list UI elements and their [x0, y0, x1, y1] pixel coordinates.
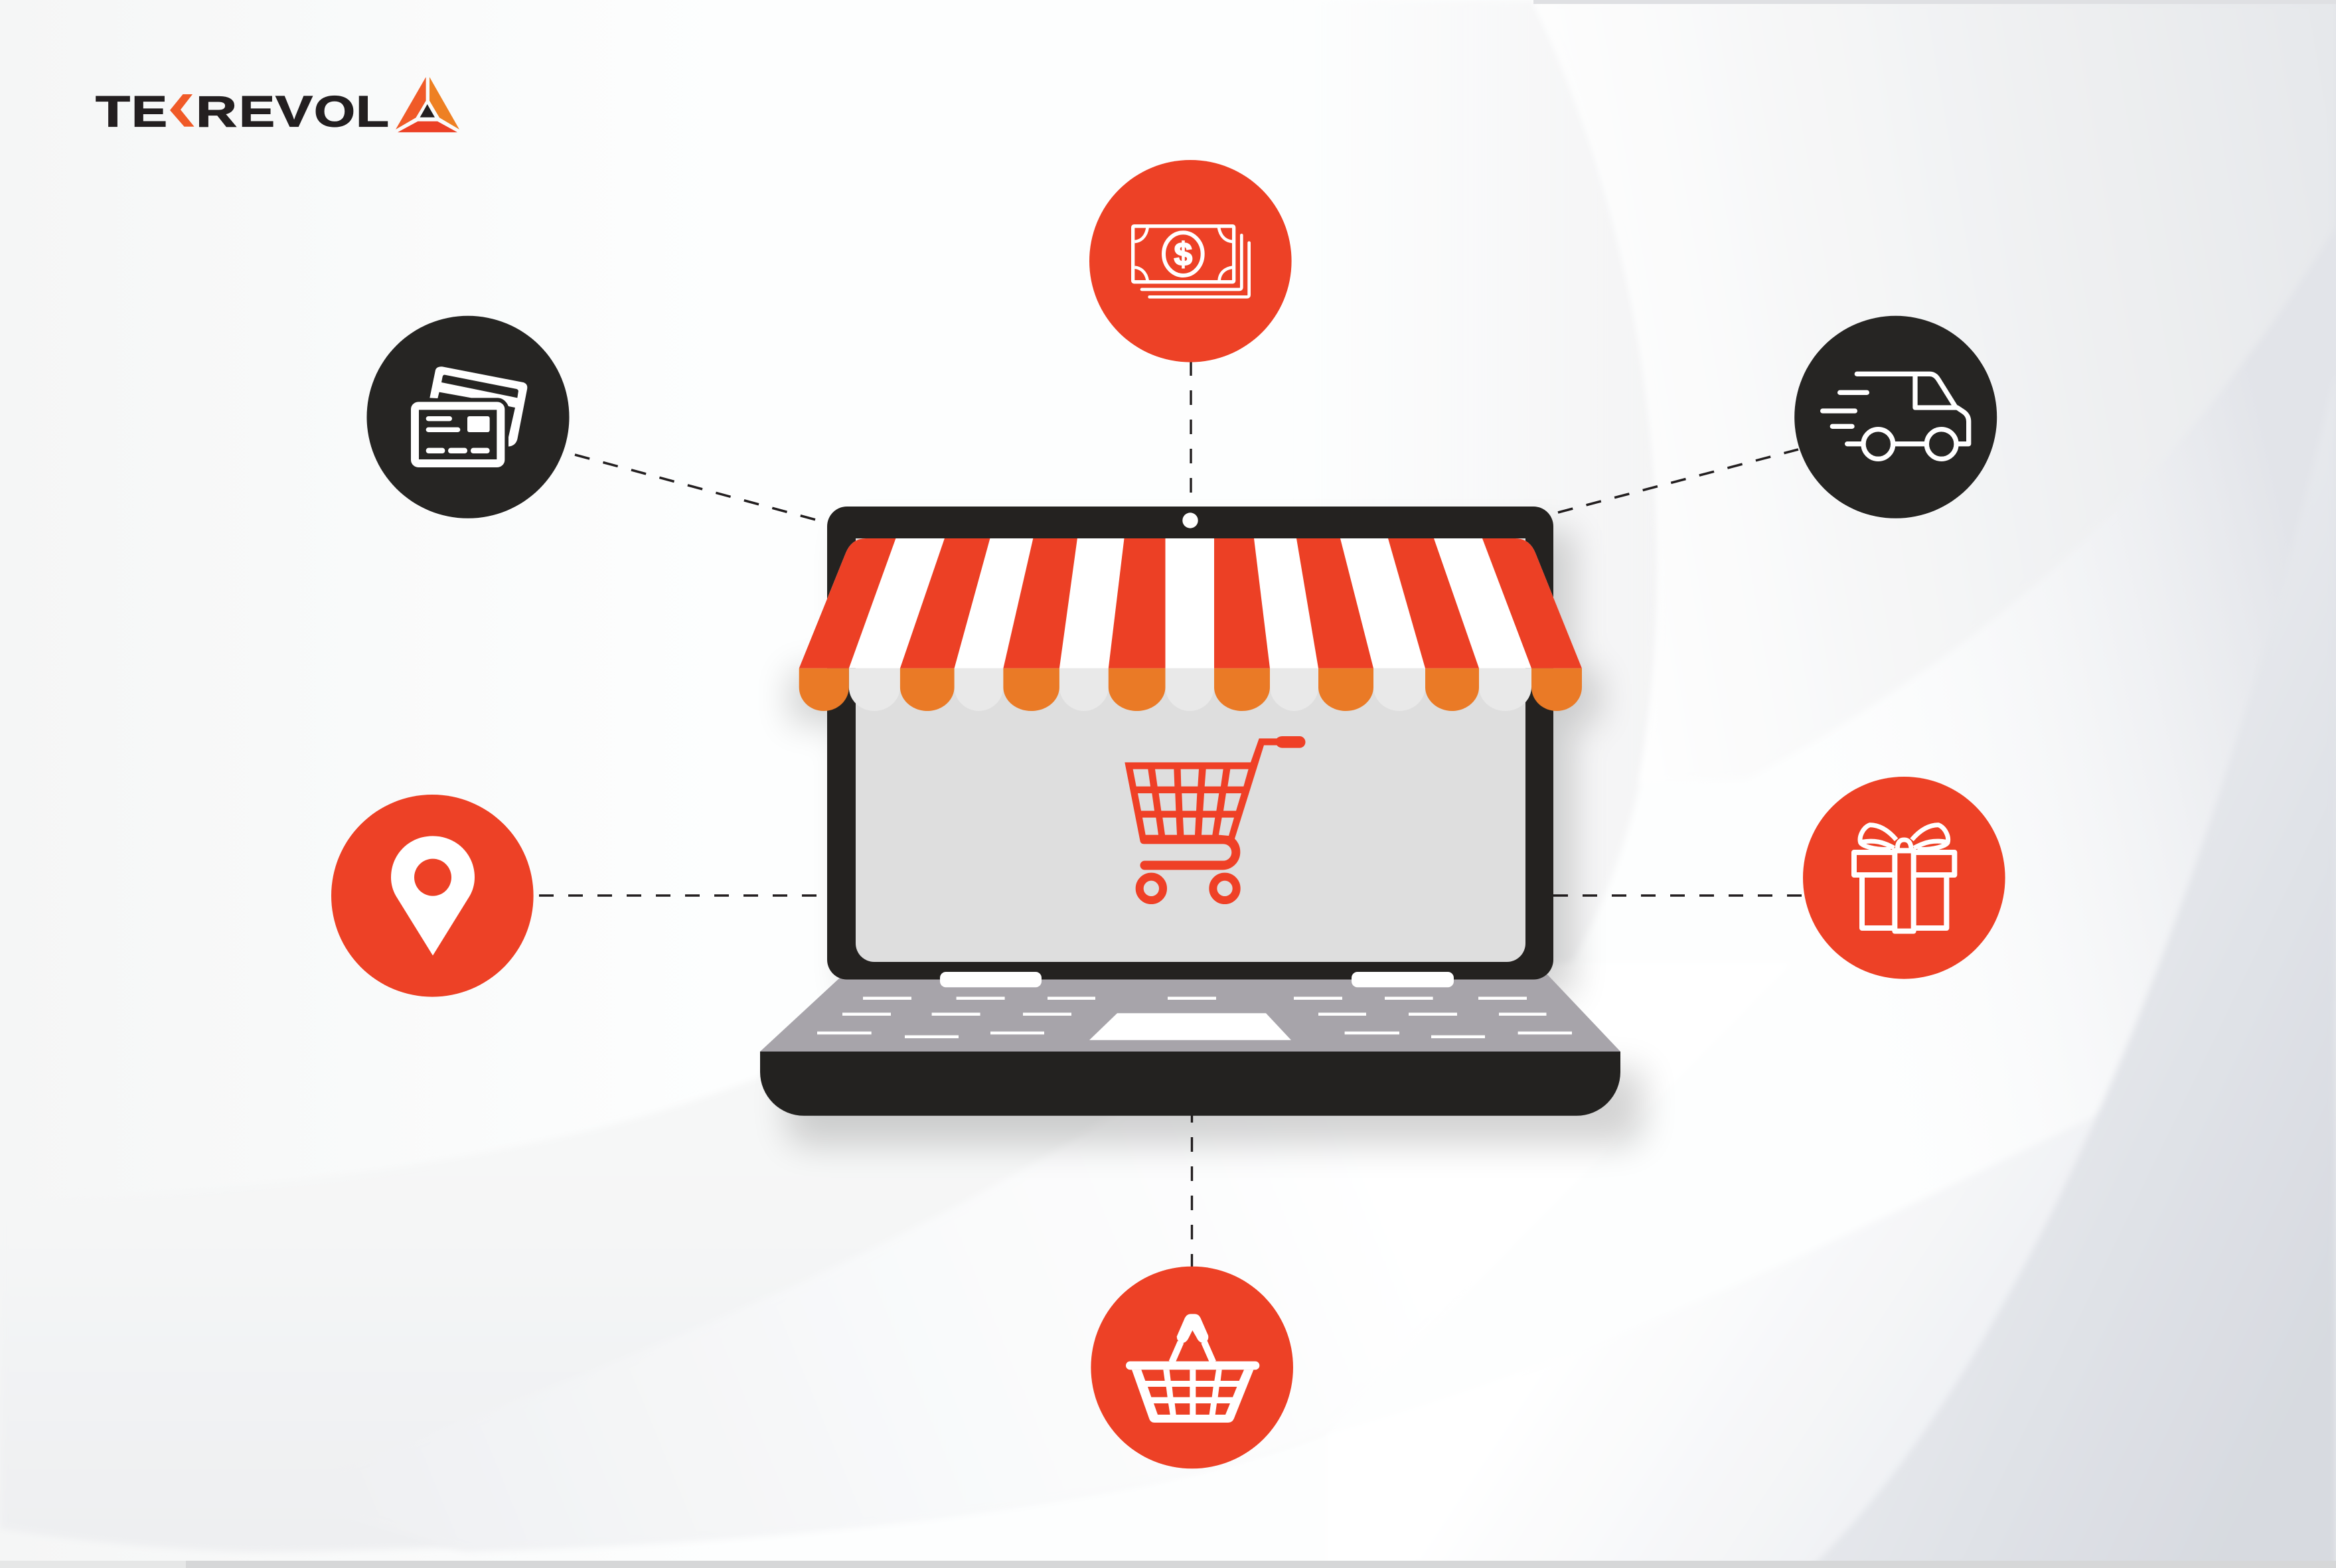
awning orange scallops: [799, 668, 1582, 711]
logo wordmark letters: E: [239, 88, 275, 135]
hinges: [940, 972, 1454, 987]
icon: gift box in red circle: [1803, 777, 2005, 979]
connector: gift to laptop: [1553, 894, 1803, 897]
icon: delivery truck in dark circle: [1794, 316, 1997, 518]
logo: Tekrevol: [96, 77, 459, 135]
keyboard keys: [817, 997, 1572, 1038]
logo chevron: [170, 94, 195, 127]
trackpad: [1089, 1013, 1291, 1040]
laptop: [760, 507, 1620, 1116]
icon: shopping basket in red circle: [1091, 1267, 1293, 1468]
icon: credit cards in dark circle: [366, 316, 570, 518]
laptop lid: [827, 507, 1553, 980]
icon: banknotes in red circle: $: [1174, 236, 1192, 273]
icon: location pin in red circle: [331, 795, 534, 997]
logo wordmark letters: T: [96, 88, 130, 135]
icon: shopping cart on screen: [1125, 736, 1305, 900]
awning red stripes: [799, 538, 1582, 668]
laptop base: [760, 1052, 1620, 1116]
laptop shadow: [787, 531, 1643, 1145]
logo wordmark letters: R: [196, 88, 237, 135]
logo wordmark letters: E: [131, 88, 167, 135]
webcam dot: [1182, 512, 1198, 528]
logo wordmark letters: O: [314, 88, 355, 135]
connector: truck to laptop: [1558, 449, 1798, 512]
logo wordmark letters: V: [275, 88, 313, 135]
logo wordmark letters: L: [356, 88, 389, 135]
storefront awning: [799, 538, 1582, 711]
logo triangle mark: [396, 77, 459, 132]
awning white scallops: [849, 668, 1531, 711]
connector: card to laptop: [575, 455, 815, 520]
laptop deck: [760, 975, 1620, 1052]
awning white canopy: [799, 538, 1582, 668]
icon: banknotes in red circle: [1089, 160, 1292, 362]
connector: basket to laptop: [1191, 1108, 1193, 1267]
logo wordmark letters: [96, 88, 389, 135]
connector: money to laptop: [1190, 361, 1192, 495]
connector: pin to laptop: [539, 894, 818, 897]
laptop screen: [856, 538, 1525, 962]
